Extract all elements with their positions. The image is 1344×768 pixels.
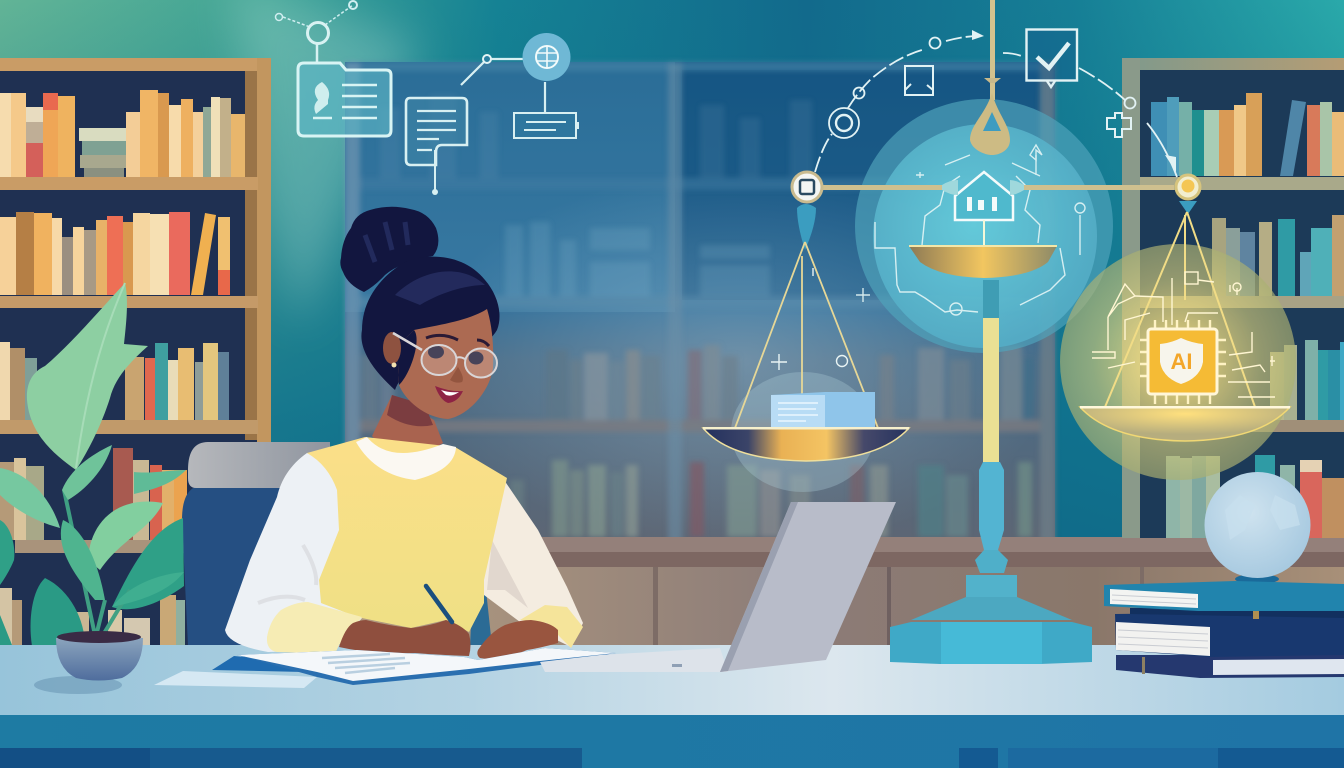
plant pot — [34, 631, 143, 694]
laptop — [540, 502, 896, 672]
plant leaves, pale front — [27, 283, 148, 470]
beam — [818, 180, 1174, 195]
pen — [426, 586, 452, 622]
sparkles near left pan — [771, 268, 848, 370]
right pan — [1080, 406, 1290, 441]
arc from left node to top arrow — [815, 36, 978, 172]
back hair — [361, 257, 500, 390]
right hand — [477, 620, 558, 659]
left drop — [797, 204, 816, 250]
blue folder — [212, 656, 320, 672]
books: right shelf row one — [1151, 93, 1344, 176]
hologram: brain node and battery — [461, 33, 579, 138]
plant stems — [64, 490, 130, 640]
small nodes — [854, 38, 1136, 108]
sweater right sleeve — [480, 474, 583, 647]
brows — [426, 335, 489, 346]
books: right shelf row four — [1166, 455, 1344, 538]
square note icon — [905, 66, 933, 95]
right arc segments — [1003, 53, 1125, 100]
desk — [0, 645, 1344, 768]
checkbox icon — [1026, 30, 1077, 87]
face — [397, 309, 493, 419]
top book — [1104, 581, 1344, 611]
earring — [392, 362, 396, 368]
books: left shelf row four — [0, 448, 187, 540]
collar — [356, 437, 456, 480]
hologram: workflow arc and icons — [815, 30, 1177, 177]
left pan ropes — [735, 242, 878, 428]
books: left shelf row one — [0, 90, 245, 177]
hair bun — [340, 207, 438, 292]
circuit traces yellow sphere — [1092, 272, 1275, 397]
plant — [0, 283, 186, 646]
glow behind left pan — [731, 372, 875, 492]
arrow to right node — [1147, 123, 1177, 177]
left hand — [339, 620, 470, 656]
ear — [383, 332, 401, 364]
laptop base — [540, 648, 728, 672]
central bowl — [909, 245, 1057, 278]
chair — [182, 442, 492, 646]
nose — [450, 367, 463, 383]
panel: lower cabinet and counter — [345, 537, 1344, 647]
icon: AI chip — [1140, 320, 1226, 404]
books: left shelf row two — [0, 212, 230, 295]
right pan ropes — [1105, 212, 1255, 407]
central pole lower — [983, 280, 999, 464]
circuit traces blue sphere — [856, 145, 1085, 315]
left pan book — [771, 392, 875, 428]
hologram: document note — [406, 98, 467, 195]
laptop lid — [720, 502, 896, 672]
left cuff — [267, 602, 362, 654]
mouth — [435, 386, 463, 403]
target ring — [829, 108, 859, 138]
glasses — [393, 333, 497, 378]
small note card — [154, 671, 317, 688]
right beam node — [1176, 175, 1200, 199]
notebook and papers — [154, 648, 616, 688]
sweater yellow body — [307, 437, 507, 632]
icon: AI chip: AI — [1170, 349, 1192, 374]
plant leaves, dark back — [112, 518, 184, 609]
neck — [372, 395, 443, 455]
arrowhead at top — [972, 30, 984, 40]
central hanger — [970, 0, 1010, 155]
person: student with glasses — [225, 207, 583, 659]
balance scale — [703, 0, 1296, 664]
puzzle icon — [1107, 113, 1131, 137]
left beam node — [792, 172, 822, 202]
panel: right bookcase — [1122, 58, 1344, 538]
sweater left sleeve — [225, 453, 362, 652]
right cuff — [520, 605, 583, 648]
books: left shelf row five — [0, 588, 185, 645]
books: right shelf row three — [1270, 340, 1344, 420]
left pan — [703, 427, 909, 461]
glow: yellow sphere — [1060, 244, 1296, 480]
panel: central blurred bookcase — [345, 62, 1060, 550]
bottom book — [1116, 655, 1344, 678]
hologram: folder profile card — [276, 1, 391, 136]
right drop — [1179, 201, 1197, 214]
open notebook — [237, 648, 616, 685]
stack of books — [1104, 581, 1344, 678]
spacer book — [1130, 608, 1344, 619]
icon: house circuit — [955, 172, 1013, 245]
eyes — [428, 346, 484, 364]
panel: left bookcase — [0, 58, 271, 648]
middle book — [1115, 611, 1344, 657]
glow: blue sphere — [855, 99, 1113, 353]
books: left shelf row three — [0, 342, 229, 420]
books: right shelf row two — [1212, 215, 1344, 296]
lower column — [890, 462, 1092, 664]
globe on stand — [1204, 472, 1310, 584]
